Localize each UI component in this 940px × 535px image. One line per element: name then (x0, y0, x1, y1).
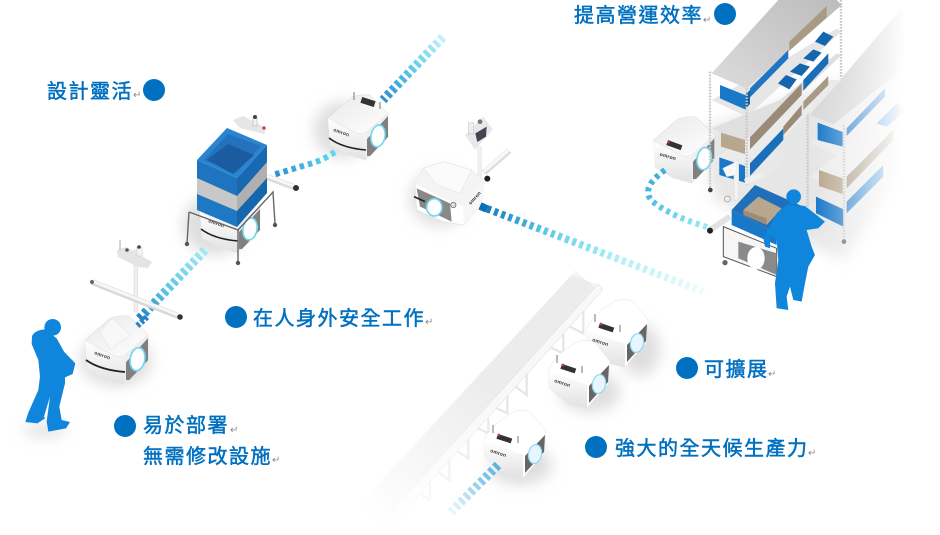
label: flexible design: ↵ (133, 90, 141, 101)
path: dashed route below conveyor robot (450, 465, 498, 513)
worker: right (763, 189, 825, 310)
shelf unit 1 (708, 0, 842, 195)
path: dashed curve top-right robot (648, 170, 707, 227)
shelf unit 2 (808, 10, 930, 244)
robot: lower left with sensor mast: omron (93, 350, 111, 362)
worker: left (25, 319, 75, 432)
robot: behind shelves: omron (659, 152, 677, 162)
robot: conveyor front: omron (489, 448, 507, 459)
warehouse shelving front (653, 0, 842, 195)
label: scalable: 可擴展 (704, 358, 768, 381)
label: scalable (676, 357, 776, 381)
robot: behind shelves (653, 117, 714, 183)
label: improve operational efficiency: 提高營運效率 (574, 4, 703, 27)
label: flexible design: 設計靈活 (47, 80, 133, 103)
robot: cart with stacked bins (185, 115, 299, 265)
floor shadows (23, 102, 660, 485)
path: dashed route centre to right (480, 206, 707, 293)
robot: conveyor middle: omron (553, 378, 571, 389)
label: powerful all-day productivity: 強大的全天候生產力 (615, 437, 808, 460)
robot: conveyor back (586, 299, 648, 367)
label: easy to deploy: 無需修改設施 (143, 445, 272, 468)
fade: right side of shelving (815, 0, 940, 300)
robot: centre with display mast: omron (468, 191, 483, 206)
label: work safely around people: 在人身外安全工作 (253, 307, 425, 330)
path: dashed start over centre robot (480, 206, 487, 209)
label: easy to deploy: 易於部署 (143, 414, 229, 437)
sensor mast and arm (233, 115, 299, 191)
fade: conveyor lower end (340, 340, 560, 535)
robot: top centre (328, 92, 388, 160)
floor shade: warehouse (700, 20, 925, 260)
path: dashed route to stacked cart (273, 152, 335, 175)
label: easy to deploy (114, 414, 280, 468)
label: powerful all-day productivity: ↵ (808, 448, 816, 459)
robot: conveyor back: omron (591, 337, 609, 348)
robot: cart with stacked bins: omron (207, 218, 225, 230)
blue bin stack (197, 128, 267, 227)
label: easy to deploy: ↵ (272, 455, 280, 466)
label: improve operational efficiency: ↵ (703, 15, 711, 26)
path: dashed route top (383, 37, 443, 100)
conveyor (350, 275, 603, 527)
path: dashed route lower left (138, 250, 205, 320)
robot: top centre: omron (332, 127, 350, 139)
robot: conveyor front (484, 410, 546, 478)
robot: lower left with sensor mast (85, 240, 183, 384)
label: scalable: ↵ (768, 369, 776, 380)
robot: centre with display mast (414, 117, 509, 225)
label: flexible design (47, 79, 165, 103)
robot: cart with bin and worker (707, 160, 803, 277)
label: work safely around people: ↵ (425, 317, 433, 328)
label: easy to deploy: ↵ (230, 425, 238, 436)
robot: conveyor middle (548, 340, 610, 408)
